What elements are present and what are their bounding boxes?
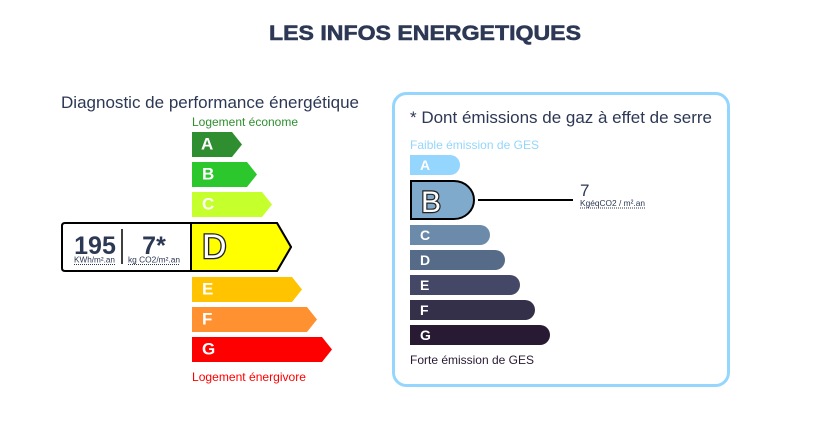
label: low emissions: Faible émission de GES xyxy=(410,138,539,152)
label: high emissions: Forte émission de GES xyxy=(410,353,534,367)
panel frame xyxy=(394,94,728,386)
energy rating marker D with values xyxy=(62,223,291,271)
panel: energy performance diagnostic xyxy=(61,93,359,384)
emissions value: 7* xyxy=(142,232,166,260)
separator xyxy=(121,229,123,264)
emissions bar E xyxy=(410,275,520,295)
emissions bar C xyxy=(410,225,490,245)
label: high consumption housing: Logement énergivore xyxy=(192,370,306,384)
energy bar B: B xyxy=(202,164,214,184)
emissions bar F xyxy=(410,300,535,320)
emissions rating marker B xyxy=(411,181,474,219)
energy bar B xyxy=(192,162,257,187)
energy bar E xyxy=(192,277,302,302)
emissions bar D: D xyxy=(420,252,430,268)
title: LES INFOS ENERGETIQUES xyxy=(269,21,581,45)
energy bar G: G xyxy=(202,340,215,358)
emissions bar G xyxy=(410,325,550,345)
connector line xyxy=(478,199,573,201)
label: low consumption housing: Logement économe xyxy=(192,115,298,129)
energy bar E: E xyxy=(202,280,213,298)
emissions value: 7 xyxy=(580,181,589,200)
energy bar A: A xyxy=(201,134,213,154)
emissions bar G: G xyxy=(420,327,431,343)
emissions bar D xyxy=(410,250,505,270)
emissions unit: KgéqCO2 / m².an xyxy=(580,198,645,208)
emissions bar F: F xyxy=(420,302,429,318)
emissions unit: kg CO2/m².an xyxy=(128,256,180,264)
energy value: 195 xyxy=(74,232,116,260)
energy bar F: F xyxy=(202,310,212,328)
energy bar F xyxy=(192,307,317,332)
emissions bar E: E xyxy=(420,277,429,293)
emissions bar A: A xyxy=(420,157,430,173)
heading: energy diagnostic: Diagnostic de performance énergétique xyxy=(61,93,359,112)
emissions bar A xyxy=(410,155,460,175)
energy bar C: C xyxy=(202,194,214,214)
panel: greenhouse gas emissions xyxy=(394,94,728,386)
rating letter D: D xyxy=(202,228,227,266)
emissions bar C: C xyxy=(420,227,430,243)
energy unit: KWh/m².an xyxy=(74,256,115,264)
energy bar C xyxy=(192,192,272,217)
energy bar A xyxy=(192,132,242,157)
heading: greenhouse gas: * Dont émissions de gaz à effet de serre xyxy=(410,108,712,127)
energy bar G xyxy=(192,337,332,362)
emissions rating marker B: B xyxy=(421,186,441,219)
